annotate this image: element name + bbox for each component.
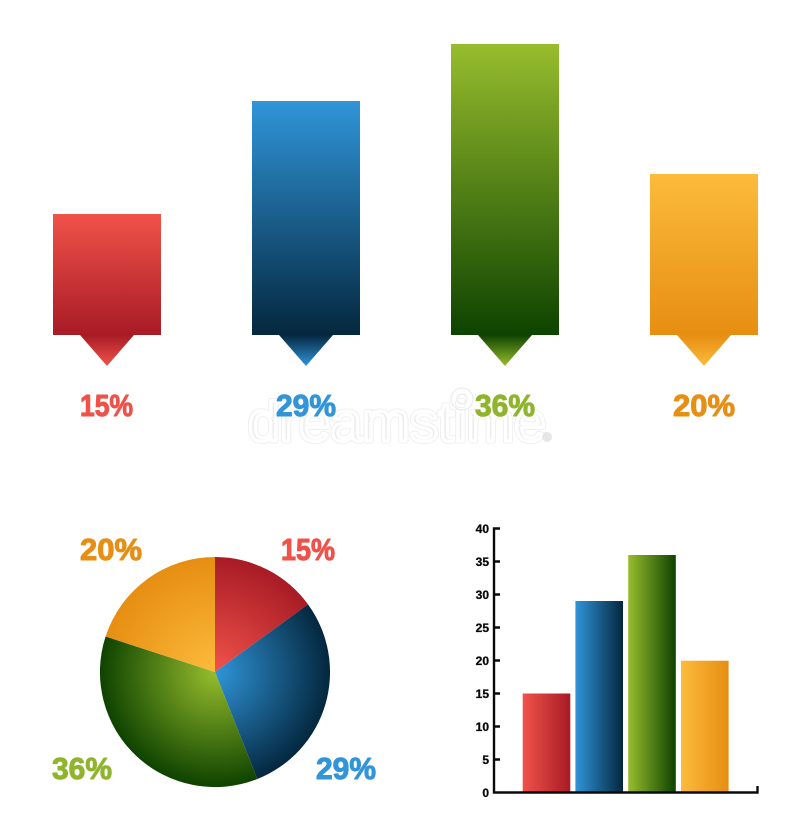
axis labels: 25	[476, 621, 489, 635]
watermark: dreamstime	[248, 390, 546, 453]
axis labels: 40	[476, 522, 489, 536]
pie label 15%: 15%	[281, 532, 335, 567]
axis labels: 35	[476, 555, 489, 569]
pie slice 36%	[100, 636, 257, 787]
axis labels: 5	[482, 753, 489, 767]
pie slice 20%	[106, 557, 215, 672]
pie chart	[52, 532, 376, 787]
panel: top ribbon bars	[53, 44, 758, 423]
red ribbon 15%	[53, 214, 161, 423]
chart axes	[494, 528, 758, 792]
column 36	[628, 555, 676, 792]
column chart	[476, 522, 758, 800]
axis labels: 0	[482, 786, 489, 800]
pie slice 29%	[215, 604, 330, 779]
green ribbon 36%: 36%	[475, 388, 535, 423]
axis labels: 20	[476, 654, 489, 668]
pie slice 15%	[215, 557, 308, 672]
column 15	[523, 694, 570, 792]
axis labels: 10	[476, 720, 489, 734]
red ribbon 15%: 15%	[80, 388, 133, 423]
axis labels: 30	[476, 588, 489, 602]
green ribbon 36%	[451, 44, 559, 423]
axis labels	[476, 522, 489, 800]
pie label 29%: 29%	[316, 751, 376, 786]
column 29	[575, 601, 623, 792]
orange ribbon 20%: 20%	[673, 388, 735, 423]
column 20	[681, 661, 729, 792]
pie label 20%: 20%	[80, 532, 142, 567]
watermark: dreamstime	[248, 390, 546, 453]
blue ribbon 29%: 29%	[276, 388, 336, 423]
pie label 36%: 36%	[52, 751, 112, 786]
axis labels: 15	[476, 687, 489, 701]
orange ribbon 20%	[650, 174, 758, 423]
blue ribbon 29%	[252, 101, 360, 423]
